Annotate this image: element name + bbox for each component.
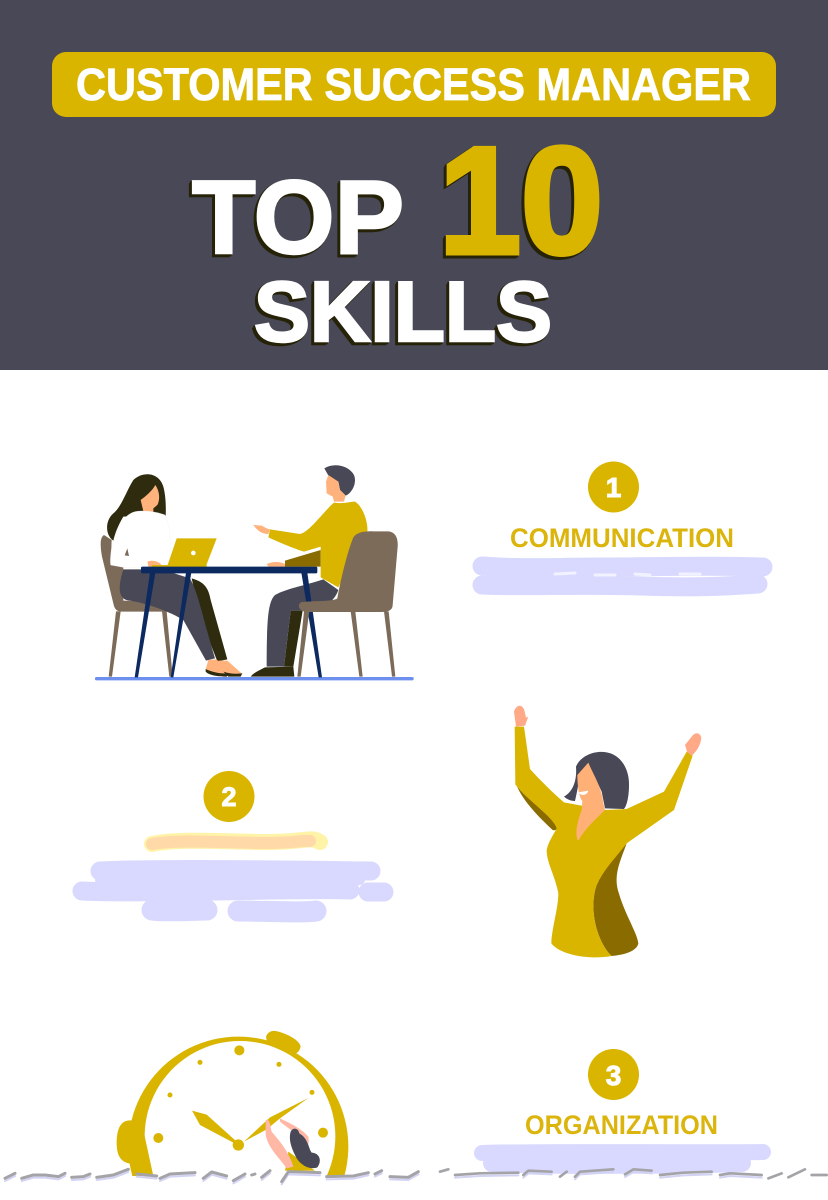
man arm back and hand [267,562,288,567]
woman back leg [192,578,227,661]
number badge 1 [588,462,639,512]
man shoe [251,667,294,677]
illustration: woman celebrating [514,706,701,957]
side button [117,1120,153,1176]
title banner: CUSTOMER SUCCESS MANAGER [76,59,751,110]
table [135,567,322,677]
illustration: two people at a table [95,465,414,680]
hair back [564,752,629,809]
skill 1: communication [482,462,763,587]
torn bottom page edge [0,1169,828,1200]
header panel [0,0,828,370]
man front leg [267,579,338,667]
skill title: ORGANIZATION [525,1110,718,1140]
woman hair [107,474,166,541]
man hand [253,525,270,534]
woman feet [206,659,229,675]
right chair [297,531,398,677]
crown button [266,1031,301,1053]
smile [578,791,588,795]
shaded sides [517,786,560,830]
woman hand [147,561,163,567]
man back leg [284,611,303,667]
floor [95,677,414,680]
man sweater [268,502,367,587]
woman face [141,485,159,514]
skill title: COMMUNICATION [510,523,734,553]
body and arms [515,727,693,957]
face and neck [576,763,605,841]
laptop [167,538,217,566]
number badge 2 [204,771,254,822]
skill 3: organization [482,1049,763,1165]
hour dots [153,1045,328,1143]
woman front leg [120,569,215,661]
blurred skill title [152,839,320,844]
number badge 3 [588,1049,639,1100]
heading: skills: SKILLS [254,265,552,360]
blurred description [82,869,384,912]
man face [326,475,346,502]
man hair [324,465,355,496]
heading: top: TOP [192,160,404,276]
blurred description [482,1152,763,1165]
skill 2 [82,771,384,912]
clock hands [192,1098,308,1151]
climbing woman [266,1118,320,1171]
number badge 3: 3 [606,1060,621,1091]
left chair [101,535,179,677]
number badge 1: 1 [606,472,621,503]
heading: 10: 10 [439,116,603,286]
hands [514,706,528,727]
clock rim [128,1037,348,1176]
blurred description [482,566,763,587]
illustration: clock [117,1031,348,1176]
woman shirt [110,511,170,567]
number badge 2: 2 [221,782,237,812]
